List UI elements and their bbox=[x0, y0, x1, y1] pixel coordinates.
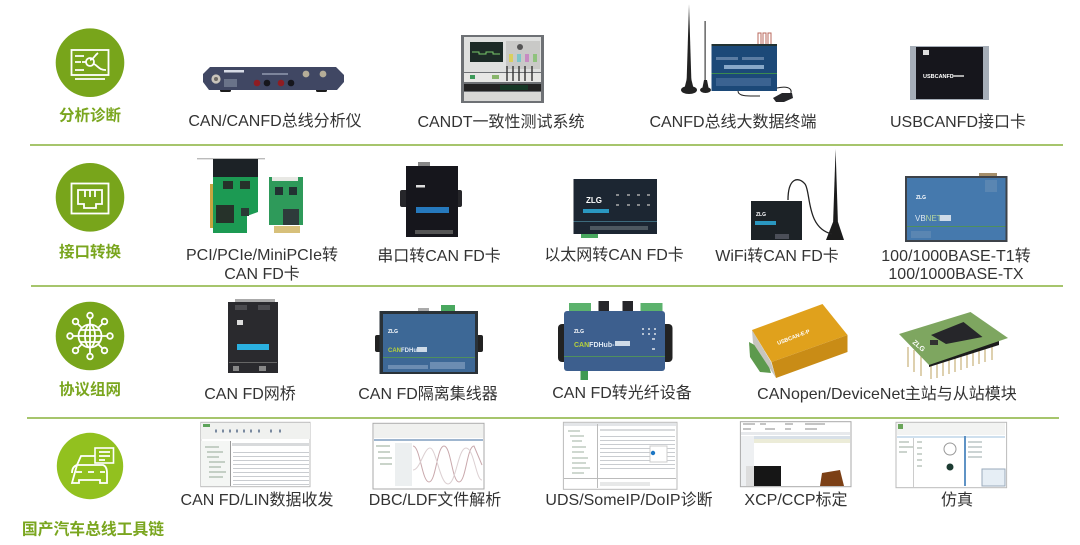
icon: car toolchain circle bbox=[57, 433, 123, 499]
label: CAN FD/LIN data: CAN FD/LIN数据收发 bbox=[181, 491, 333, 509]
device: PCI cards bbox=[197, 158, 303, 233]
screenshot: DBC/LDF parse bbox=[373, 423, 484, 489]
device: USBCAN card: USBCANFD bbox=[923, 74, 954, 80]
label: PCI cards bbox=[186, 246, 338, 283]
device: serial converter bbox=[400, 162, 462, 237]
label: UDS diagnostics: UDS/SomeIP/DoIP诊断 bbox=[545, 491, 713, 509]
device: VBNET bbox=[905, 173, 1008, 242]
heading: interface: 接口转换 bbox=[59, 243, 121, 261]
device: fiber converter bbox=[558, 301, 672, 380]
screenshot: XCP/CCP calibration bbox=[740, 422, 851, 487]
device: ethernet converter bbox=[574, 179, 657, 238]
device: VBNET: VBNET- bbox=[915, 214, 944, 223]
label: simulation: 仿真 bbox=[941, 491, 973, 509]
label: CANDT system: CANDT一致性测试系统 bbox=[417, 113, 585, 131]
device: embedded module bbox=[899, 312, 1008, 379]
heading: network: 协议组网 bbox=[59, 380, 121, 398]
label: CANopen modules: CANopen/DeviceNet主站与从站模块 bbox=[757, 385, 1017, 403]
label: VBNET bbox=[881, 247, 1031, 283]
label: USBCAN card: USBCANFD接口卡 bbox=[890, 113, 1026, 131]
label: DBC/LDF parse: DBC/LDF文件解析 bbox=[369, 491, 501, 509]
label: WiFi converter: WiFi转CAN FD卡 bbox=[715, 247, 839, 265]
device: USBCAN yellow module: USBCAN-E-P bbox=[777, 329, 811, 347]
device: WiFi converter bbox=[751, 149, 844, 240]
device: CAN FD bridge bbox=[228, 299, 278, 373]
device: CAN FD hub: CANFDHub bbox=[388, 348, 421, 354]
device: CANDT rack bbox=[461, 35, 544, 103]
label: CAN FD hub: CAN FD隔离集线器 bbox=[358, 385, 498, 403]
device: ethernet converter: ZLG bbox=[586, 196, 602, 205]
label: VBNET: 100/1000BASE-T1转 bbox=[881, 247, 1031, 265]
heading: toolchain: 国产汽车总线工具链 bbox=[22, 520, 164, 538]
icon: diagnostics circle bbox=[56, 28, 124, 97]
device: CAN analyzer bbox=[203, 67, 344, 92]
heading: diagnostics: 分析诊断 bbox=[59, 106, 121, 124]
label: CAN analyzer: CAN/CANFD总线分析仪 bbox=[188, 112, 362, 130]
device: USBCAN yellow module bbox=[749, 304, 848, 378]
device: WiFi converter: ZLG bbox=[756, 212, 766, 218]
label: ethernet converter: 以太网转CAN FD卡 bbox=[544, 246, 684, 264]
label: data terminal: CANFD总线大数据终端 bbox=[649, 113, 817, 131]
label: fiber converter: CAN FD转光纤设备 bbox=[552, 384, 692, 402]
screenshot: CAN FD/LIN data bbox=[201, 422, 310, 487]
device: USBCAN card bbox=[910, 46, 989, 100]
device: fiber converter: CANFDHub- bbox=[574, 342, 615, 349]
screenshot: simulation bbox=[896, 422, 1007, 488]
label: VBNET: 100/1000BASE-TX bbox=[888, 266, 1024, 283]
label: serial converter: 串口转CAN FD卡 bbox=[377, 247, 501, 265]
label: CAN FD bridge: CAN FD网桥 bbox=[204, 385, 296, 403]
icon: interface circle bbox=[56, 163, 124, 232]
label: PCI cards: CAN FD卡 bbox=[224, 265, 300, 283]
device: embedded module: ZLG bbox=[911, 339, 926, 354]
device: VBNET: ZLG bbox=[916, 195, 926, 201]
device: CAN FD hub bbox=[375, 305, 483, 374]
icon: network circle bbox=[56, 302, 124, 370]
label: XCP/CCP calibration: XCP/CCP标定 bbox=[744, 491, 848, 509]
device: CAN FD hub: ZLG bbox=[388, 329, 398, 335]
device: fiber converter: ZLG bbox=[574, 329, 584, 335]
label: PCI cards: PCI/PCIe/MiniPCIe转 bbox=[186, 246, 338, 264]
device: data terminal bbox=[681, 4, 793, 102]
screenshot: UDS diagnostics bbox=[563, 422, 677, 489]
